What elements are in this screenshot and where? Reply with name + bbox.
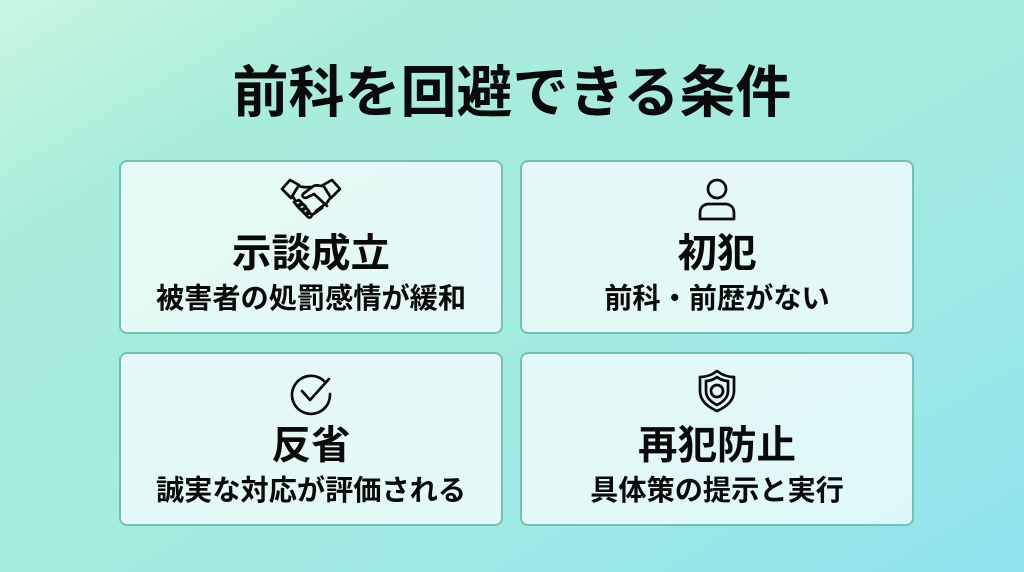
text: 被害者の処罰感情が緩和 [156, 282, 466, 314]
text: 誠実な対応が評価される [156, 474, 466, 506]
panel: 示談成立 [119, 160, 503, 334]
heading: 初犯 [678, 232, 756, 276]
title: 前科を回避できる条件 [233, 61, 791, 124]
icon: person [698, 178, 736, 220]
panel: 反省 [119, 352, 503, 526]
heading: 反省 [272, 424, 350, 468]
icon: check circle [290, 374, 332, 416]
panel: 初犯 [520, 160, 914, 334]
heading: 再犯防止 [638, 424, 796, 468]
panel: 再犯防止 [520, 352, 914, 526]
icon: shield [698, 370, 736, 412]
heading: 示談成立 [232, 232, 390, 276]
text: 具体策の提示と実行 [590, 474, 844, 506]
text: 前科・前歴がない [604, 282, 830, 314]
icon: handshake [280, 178, 342, 219]
